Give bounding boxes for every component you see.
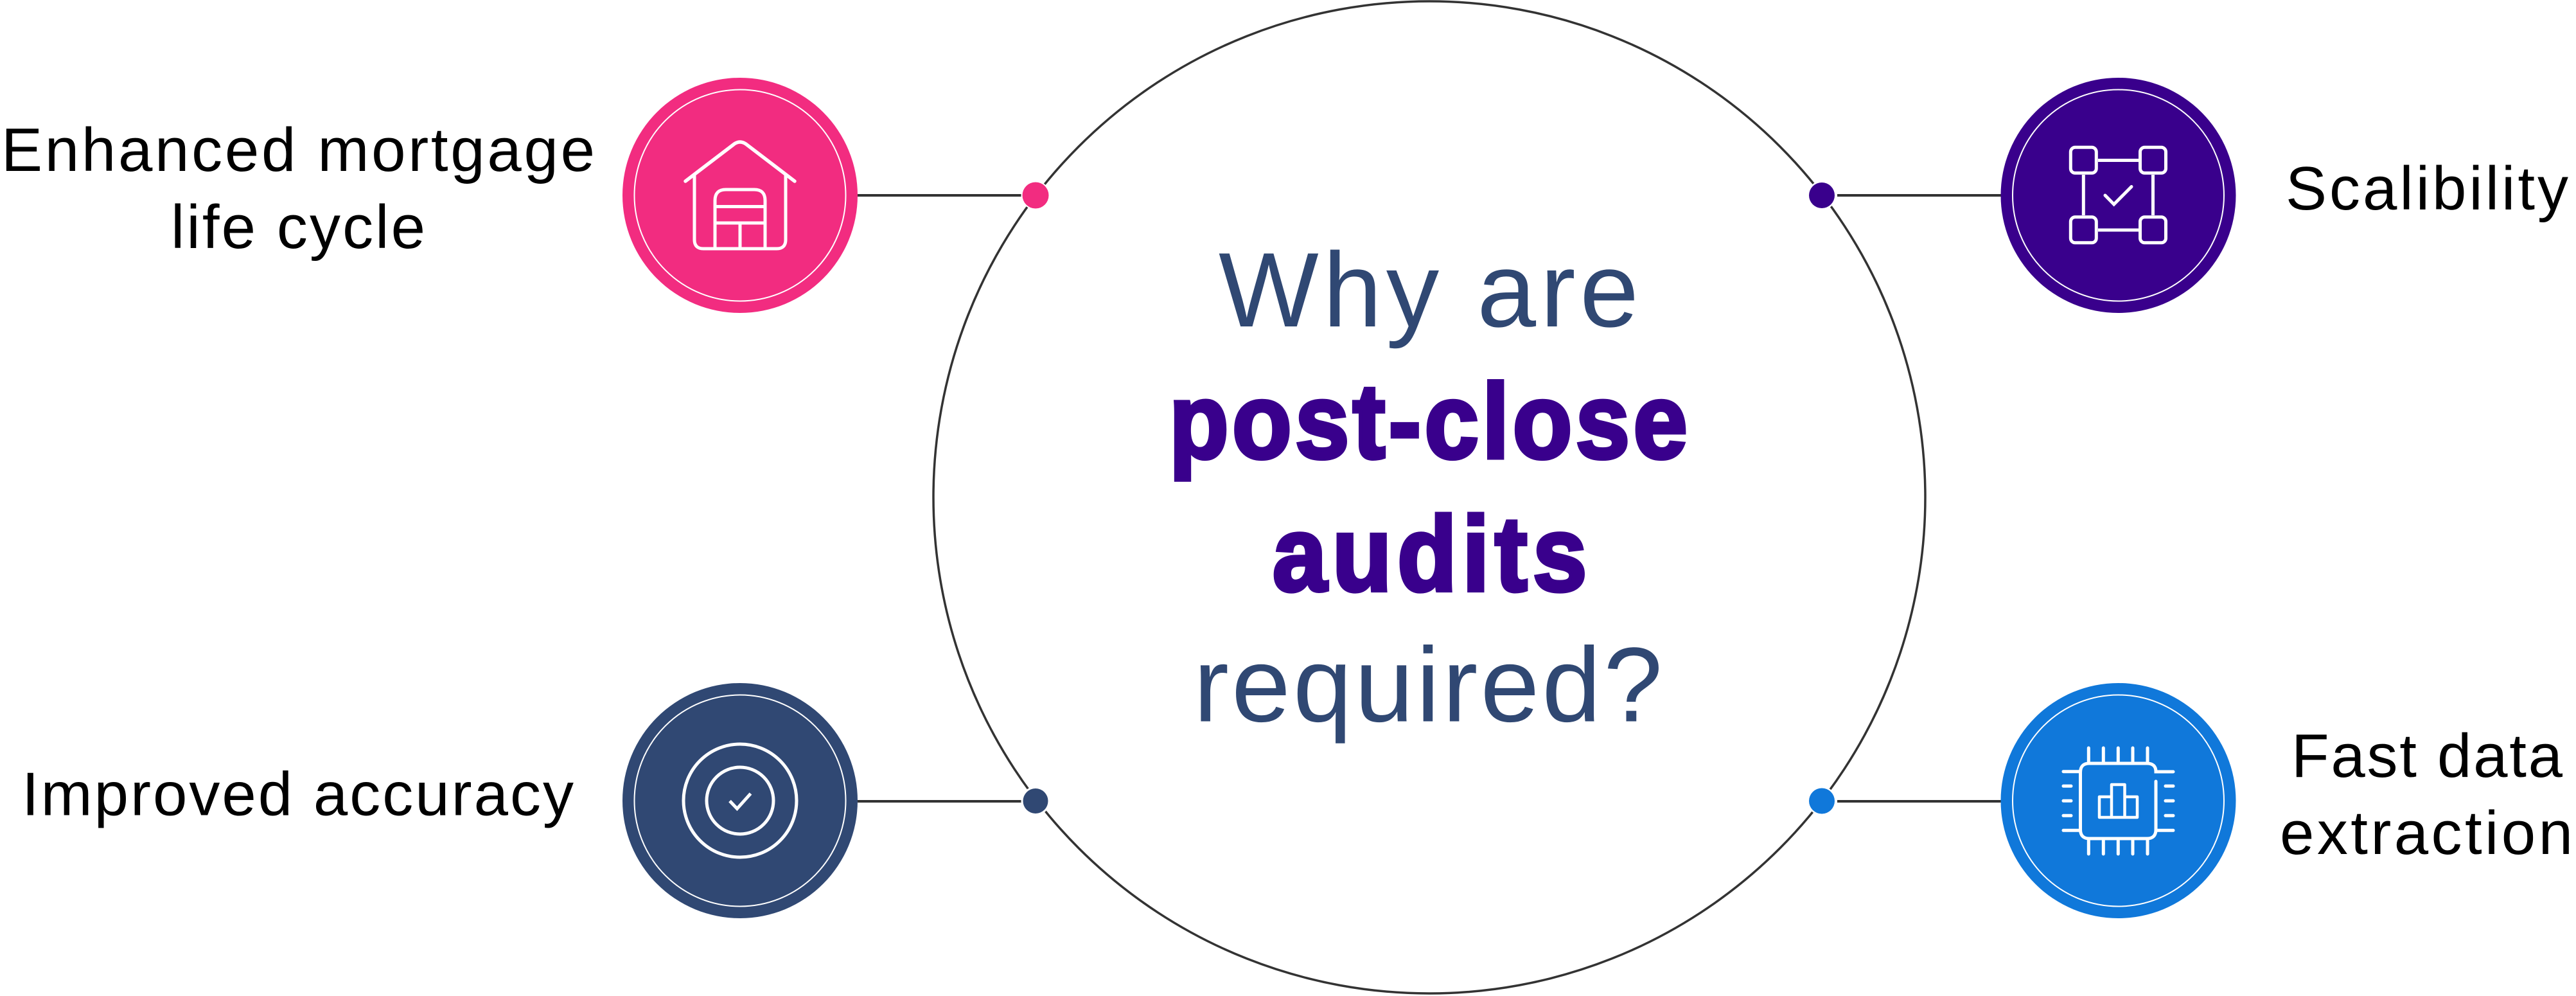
heading: why are post-close audits required: required?: [1194, 626, 1663, 744]
central circle outline: [933, 1, 1925, 993]
label: improved accuracy: Improved accuracy: [22, 760, 574, 829]
connector: fast data extraction: [1808, 787, 2001, 815]
connector: enhanced mortgage: [858, 181, 1050, 209]
heading: why are post-close audits required: audits: [1273, 494, 1587, 613]
heading: why are post-close audits required: Why are: [1219, 231, 1639, 349]
badge: chip data icon: [2000, 683, 2236, 918]
heading: why are post-close audits required: post-close: [1169, 362, 1688, 481]
label: enhanced mortgage life cycle: [1, 116, 595, 262]
label: fast data extraction: extraction: [2280, 799, 2573, 867]
label: scalibility: Scalibility: [2286, 154, 2568, 223]
connector: scalability: [1808, 181, 2001, 209]
label: enhanced mortgage life cycle: Enhanced mortgage: [1, 116, 595, 184]
connector: improved accuracy: [858, 787, 1050, 815]
label: fast data extraction: Fast data: [2291, 722, 2563, 790]
badge: house icon: [622, 78, 858, 313]
heading: why are post-close audits required: [1169, 231, 1688, 744]
badge: target check icon: [622, 683, 858, 918]
label: fast data extraction: [2280, 722, 2573, 867]
badge: network scalability icon: [2000, 78, 2236, 313]
label: enhanced mortgage life cycle: life cycle: [171, 193, 425, 262]
